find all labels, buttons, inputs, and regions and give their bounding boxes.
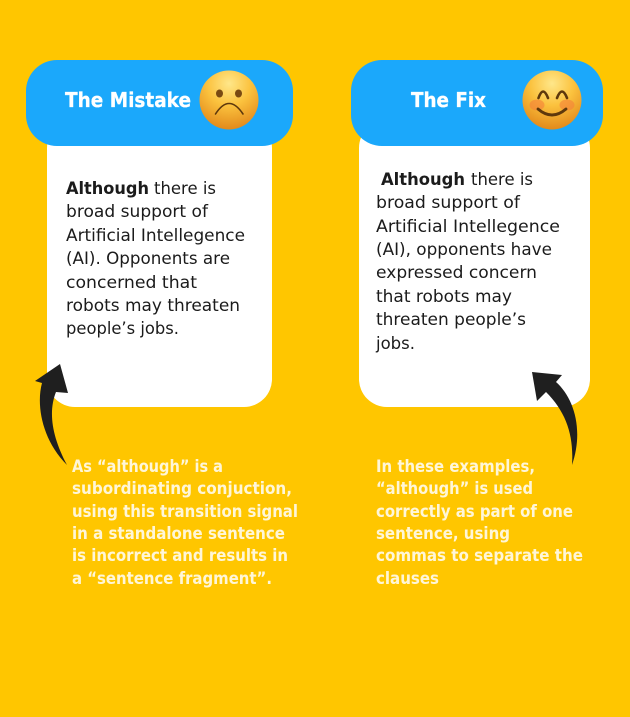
text block: mistake example: there is <box>154 179 216 198</box>
text block: fix explanation: “although” is used <box>376 479 533 498</box>
text block: fix explanation: commas to separate the <box>376 546 583 565</box>
text block: fix example: broad support of <box>376 193 521 212</box>
text block: mistake example: concerned that <box>66 273 198 292</box>
text block: fix example: there is <box>471 170 533 189</box>
text block: mistake explanation: using this transition signal <box>72 502 298 521</box>
heading: the mistake: The Mistake <box>65 88 191 112</box>
text block: mistake explanation: As “although” is a <box>72 457 223 476</box>
text block: fix example: threaten people’s <box>376 310 526 329</box>
text block: mistake example: Artificial Intellegence <box>66 226 245 245</box>
text block: fix example: Artificial Intellegence <box>376 217 560 236</box>
panel: the fix <box>351 60 603 407</box>
text block: mistake explanation: a “sentence fragment”. <box>72 569 272 588</box>
panel: the mistake <box>26 60 293 407</box>
text block: mistake example: (AI). Opponents are <box>66 249 230 268</box>
text block: fix explanation: clauses <box>376 569 439 588</box>
text block: mistake explanation: is incorrect and results in <box>72 546 288 565</box>
text block: mistake example: broad support of <box>66 202 209 221</box>
white card: mistake <box>47 120 272 407</box>
text block: fix explanation: correctly as part of one <box>376 502 573 521</box>
header bar: mistake <box>26 60 293 146</box>
text block: fix example: (AI), opponents have <box>376 240 552 259</box>
text block: fix explanation: In these examples, <box>376 457 535 476</box>
text block: mistake example: Although <box>66 179 149 198</box>
arrow: left, pointing to mistake card <box>35 364 68 465</box>
text block: fix example: expressed concern <box>376 263 537 282</box>
white card: fix <box>359 120 590 407</box>
icon: smiling face <box>522 70 582 130</box>
heading: the fix: The Fix <box>411 88 486 112</box>
text block: fix example: Although <box>381 170 465 189</box>
text block: mistake explanation: in a standalone sentence <box>72 524 285 543</box>
text block: mistake explanation: subordinating conjuction, <box>72 479 292 498</box>
text block: fix example: jobs. <box>375 334 415 353</box>
header bar: fix <box>351 60 603 146</box>
text block: mistake example: people’s jobs. <box>66 319 179 338</box>
text block: fix example: that robots may <box>376 287 512 306</box>
arrow: right, pointing to fix card <box>532 372 577 465</box>
text block: fix explanation: sentence, using <box>376 524 510 543</box>
text block: mistake example: robots may threaten <box>66 296 240 315</box>
icon: sad face <box>200 70 258 130</box>
